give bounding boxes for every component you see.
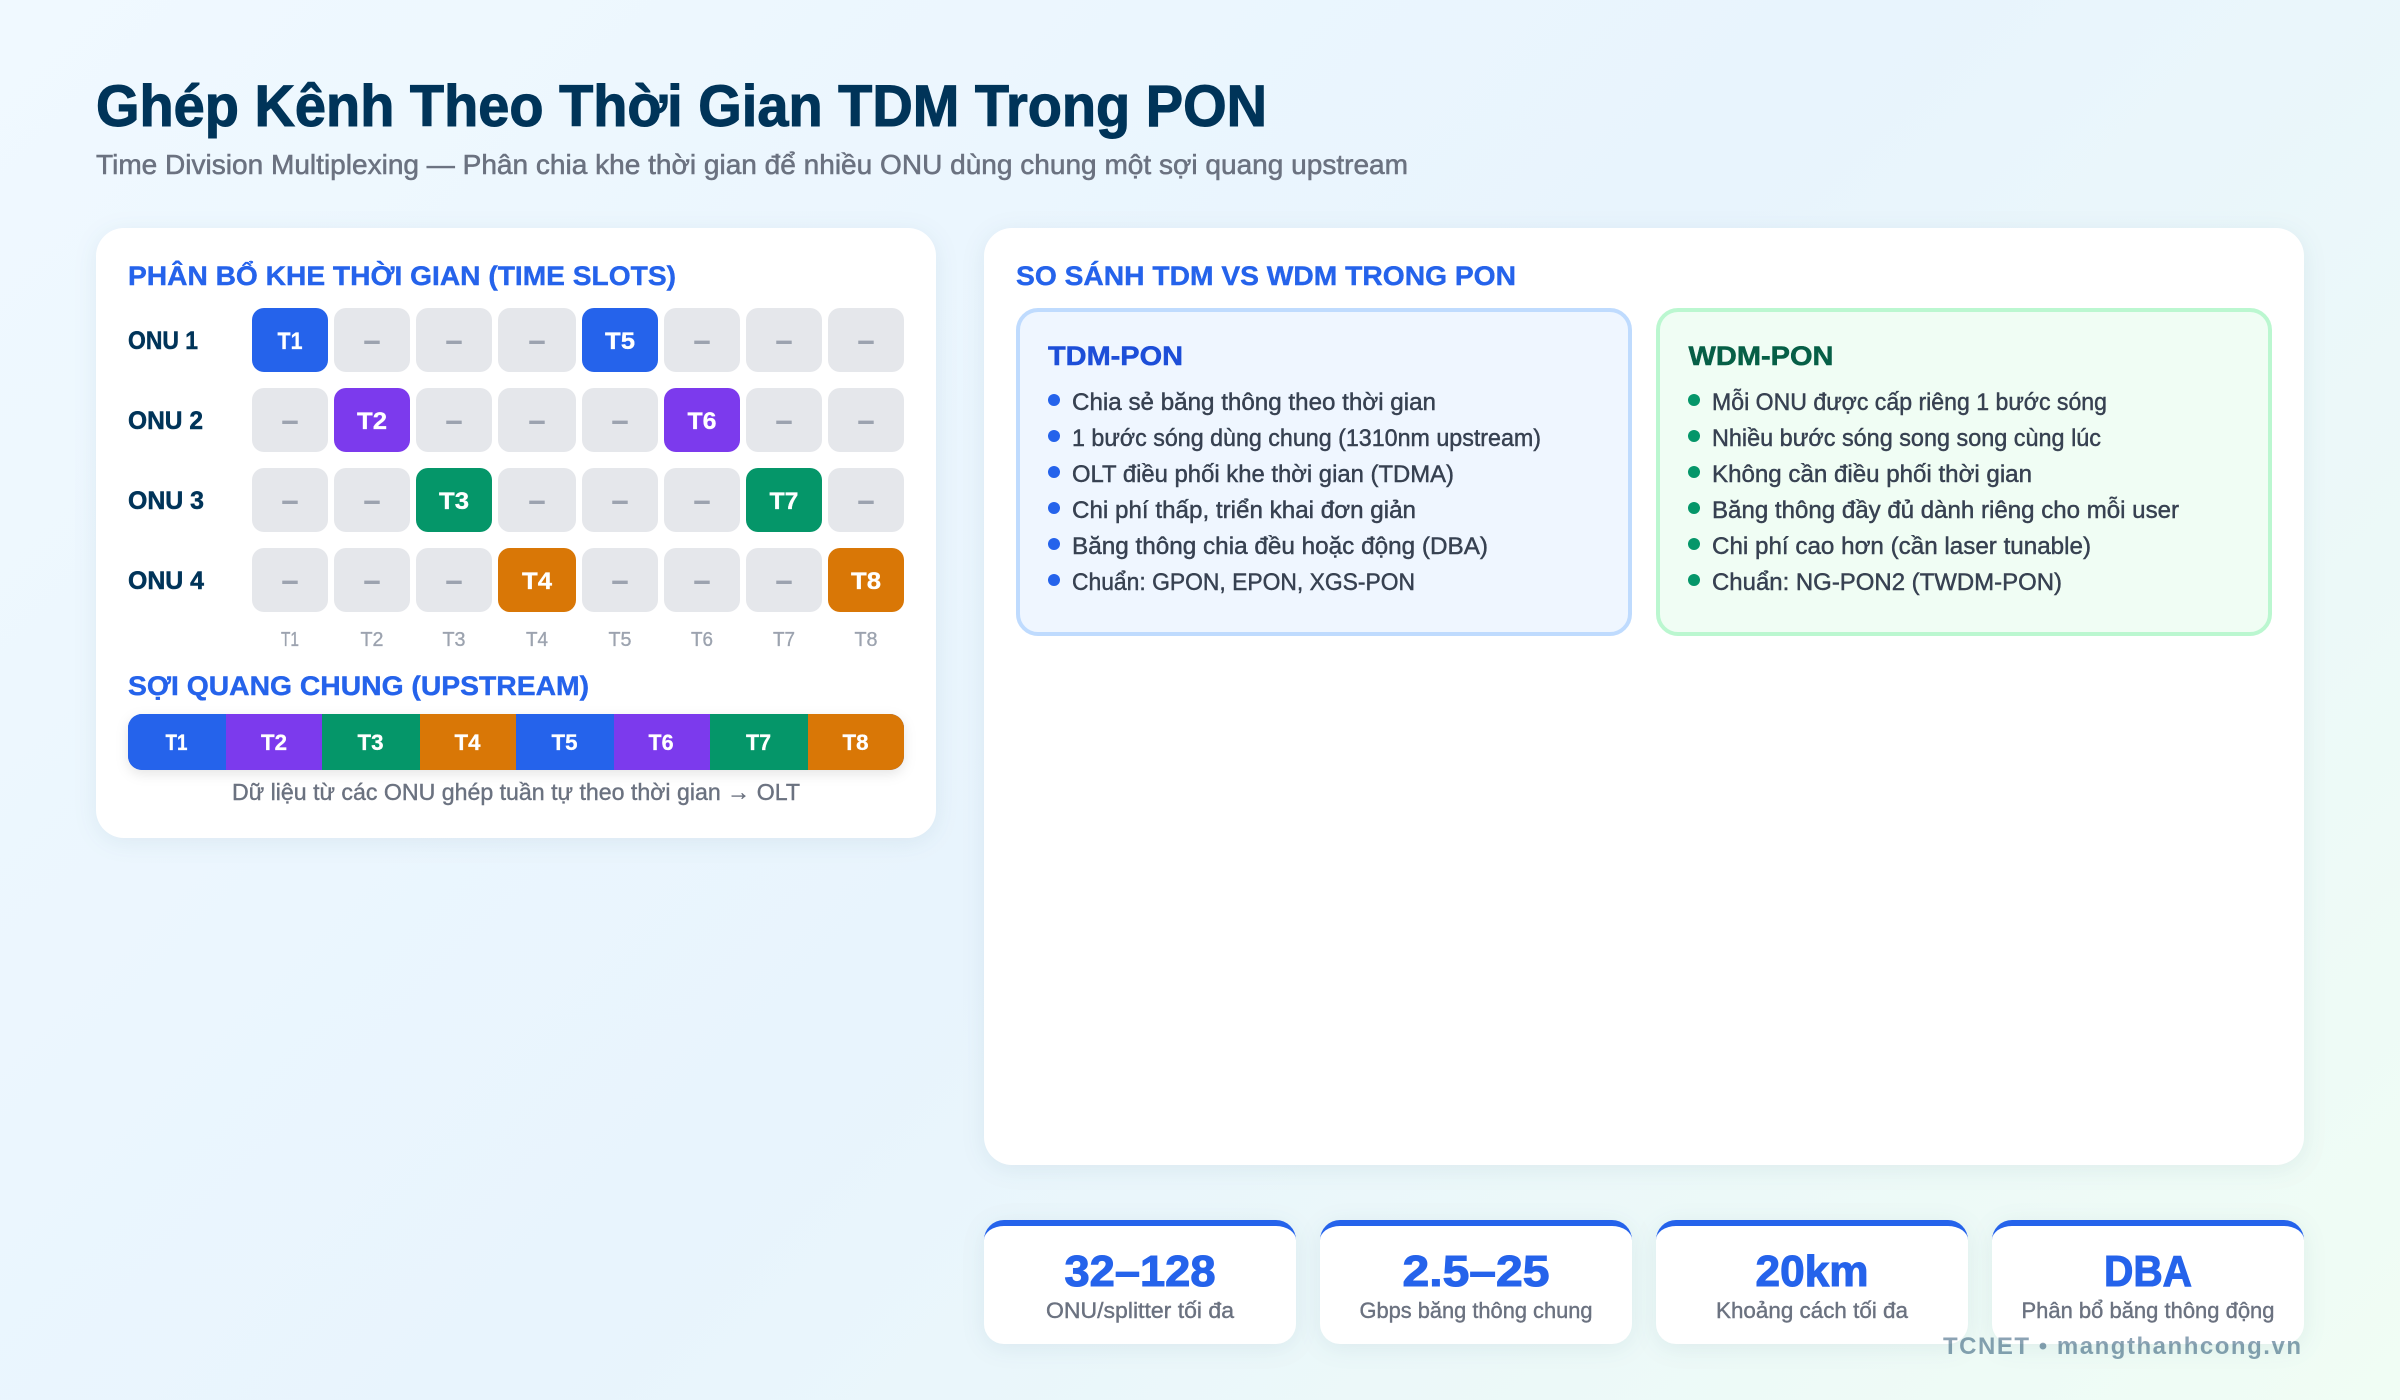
row: ONU 4: –: [446, 568, 462, 595]
TDM-PON list: Chia sẻ băng thông theo thời gian: [1072, 389, 1436, 416]
time axis labels: T7: [773, 629, 795, 651]
row: ONU 3: –: [364, 488, 380, 515]
shared fiber bar: T4: [454, 730, 481, 755]
stat: max distance: [1656, 1220, 1968, 1344]
row: ONU 2: T6: [688, 408, 716, 435]
card: TDM-PON: [1018, 310, 1630, 634]
row: ONU 4: –: [694, 568, 710, 595]
stat: max distance: 20km: [1756, 1247, 1868, 1296]
TDM-PON list: Chi phí thấp, triển khai đơn giản: [1072, 497, 1416, 524]
row: ONU 1: –: [776, 328, 792, 355]
row: ONU 4: –: [612, 568, 628, 595]
row: ONU 4: T8: [851, 568, 881, 595]
row: ONU 2: –: [858, 408, 874, 435]
row: ONU 1: [128, 308, 904, 372]
time axis labels: T3: [442, 629, 466, 651]
row: ONU 3: –: [282, 488, 298, 515]
row: ONU 1: –: [858, 328, 874, 355]
stat: shared bandwidth: 2.5–25: [1402, 1247, 1550, 1296]
stat: DBA: [1992, 1220, 2304, 1344]
time axis labels: T6: [691, 629, 713, 651]
row: ONU 4: –: [776, 568, 792, 595]
shared fiber bar: T1: [166, 730, 188, 755]
time axis labels: T5: [608, 629, 632, 651]
stat: ONU per splitter: ONU/splitter tối đa: [1046, 1298, 1235, 1323]
TDM-PON list: [1048, 389, 1541, 596]
row: ONU 3: –: [858, 488, 874, 515]
WDM-PON list: Không cần điều phối thời gian: [1712, 461, 2032, 488]
WDM-PON list: [1688, 389, 2179, 596]
TDM-PON list: Chuẩn: GPON, EPON, XGS-PON: [1072, 569, 1415, 596]
row: ONU 4: –: [364, 568, 380, 595]
row: ONU 1: –: [529, 328, 545, 355]
time axis labels: [281, 629, 878, 651]
shared fiber bar: T3: [358, 730, 384, 755]
heading: comparison: SO SÁNH TDM VS WDM TRONG PON: [1016, 260, 1516, 291]
shared fiber bar: T7: [746, 730, 771, 755]
WDM-PON heading: WDM-PON: [1688, 341, 1834, 371]
heading: shared fiber: SỢI QUANG CHUNG (UPSTREAM): [128, 671, 589, 701]
time axis labels: T1: [281, 629, 299, 651]
row: ONU 3: –: [694, 488, 710, 515]
panel: time slot allocation: [96, 228, 936, 838]
shared fiber bar: T8: [842, 730, 868, 755]
shared fiber bar: T5: [552, 730, 578, 755]
time axis labels: T2: [360, 629, 384, 651]
stat: DBA: DBA: [2104, 1247, 2192, 1296]
heading: time slots: PHÂN BỔ KHE THỜI GIAN (TIME SLOTS): [128, 260, 676, 291]
time axis labels: T4: [526, 629, 548, 651]
shared fiber bar: T2: [261, 730, 287, 755]
row: ONU 2: T2: [357, 408, 387, 435]
row: ONU 2: –: [612, 408, 628, 435]
row: ONU 1: T5: [605, 328, 635, 355]
stat: DBA: Phân bổ băng thông động: [2022, 1298, 2274, 1323]
row: ONU 2: –: [529, 408, 545, 435]
shared fiber bar: [128, 714, 904, 770]
stat: shared bandwidth: Gbps băng thông chung: [1360, 1298, 1592, 1323]
row: ONU 4: –: [282, 568, 298, 595]
row: ONU 2: ONU 2: [128, 407, 203, 435]
row: ONU 3: –: [529, 488, 545, 515]
subtitle: Time Division Multiplexing — Phân chia khe thời gian để nhiều ONU dùng chung một sợi quang upstream: [96, 149, 1408, 180]
row: ONU 1: –: [446, 328, 462, 355]
row: ONU 2: [128, 388, 904, 452]
row: ONU 2: –: [776, 408, 792, 435]
row: ONU 3: [128, 468, 904, 532]
row: ONU 1: –: [694, 328, 710, 355]
stat: shared bandwidth: [1320, 1220, 1632, 1344]
watermark: TCNET • mangthanhcong.vn: [1943, 1333, 2301, 1360]
row: ONU 1: T1: [278, 328, 302, 355]
WDM-PON list: Mỗi ONU được cấp riêng 1 bước sóng: [1712, 389, 2107, 416]
row: ONU 2: –: [446, 408, 462, 435]
row: ONU 4: ONU 4: [128, 567, 204, 595]
TDM-PON list: Băng thông chia đều hoặc động (DBA): [1072, 533, 1488, 560]
fiber caption: Dữ liệu từ các ONU ghép tuần tự theo thời gian → OLT: [232, 779, 800, 805]
row: ONU 3: –: [612, 488, 628, 515]
WDM-PON list: Chi phí cao hơn (cần laser tunable): [1712, 533, 2091, 560]
WDM-PON list: Băng thông đầy đủ dành riêng cho mỗi user: [1712, 497, 2179, 524]
row: ONU 1: –: [364, 328, 380, 355]
row: ONU 4: [128, 548, 904, 612]
WDM-PON list: Chuẩn: NG-PON2 (TWDM-PON): [1712, 569, 2062, 596]
stat: max distance: Khoảng cách tối đa: [1716, 1298, 1909, 1323]
stat: ONU per splitter: [984, 1220, 1296, 1344]
TDM-PON list: OLT điều phối khe thời gian (TDMA): [1072, 461, 1454, 488]
shared fiber bar: T6: [648, 730, 674, 755]
title: Ghép Kênh Theo Thời Gian TDM Trong PON: [96, 74, 1267, 139]
card: WDM-PON: [1658, 310, 2270, 634]
WDM-PON list: Nhiều bước sóng song song cùng lúc: [1712, 425, 2101, 452]
row: ONU 2: –: [282, 408, 298, 435]
row: ONU 3: T7: [770, 488, 798, 515]
row: ONU 1: ONU 1: [128, 327, 198, 355]
panel: TDM vs WDM comparison: [984, 228, 2304, 1165]
row: ONU 4: T4: [522, 568, 553, 595]
row: ONU 3: T3: [439, 488, 469, 515]
TDM-PON heading: TDM-PON: [1048, 341, 1183, 371]
TDM-PON list: 1 bước sóng dùng chung (1310nm upstream): [1072, 425, 1541, 452]
time axis labels: T8: [854, 629, 878, 651]
stat: ONU per splitter: 32–128: [1064, 1247, 1216, 1296]
row: ONU 3: ONU 3: [128, 487, 204, 515]
